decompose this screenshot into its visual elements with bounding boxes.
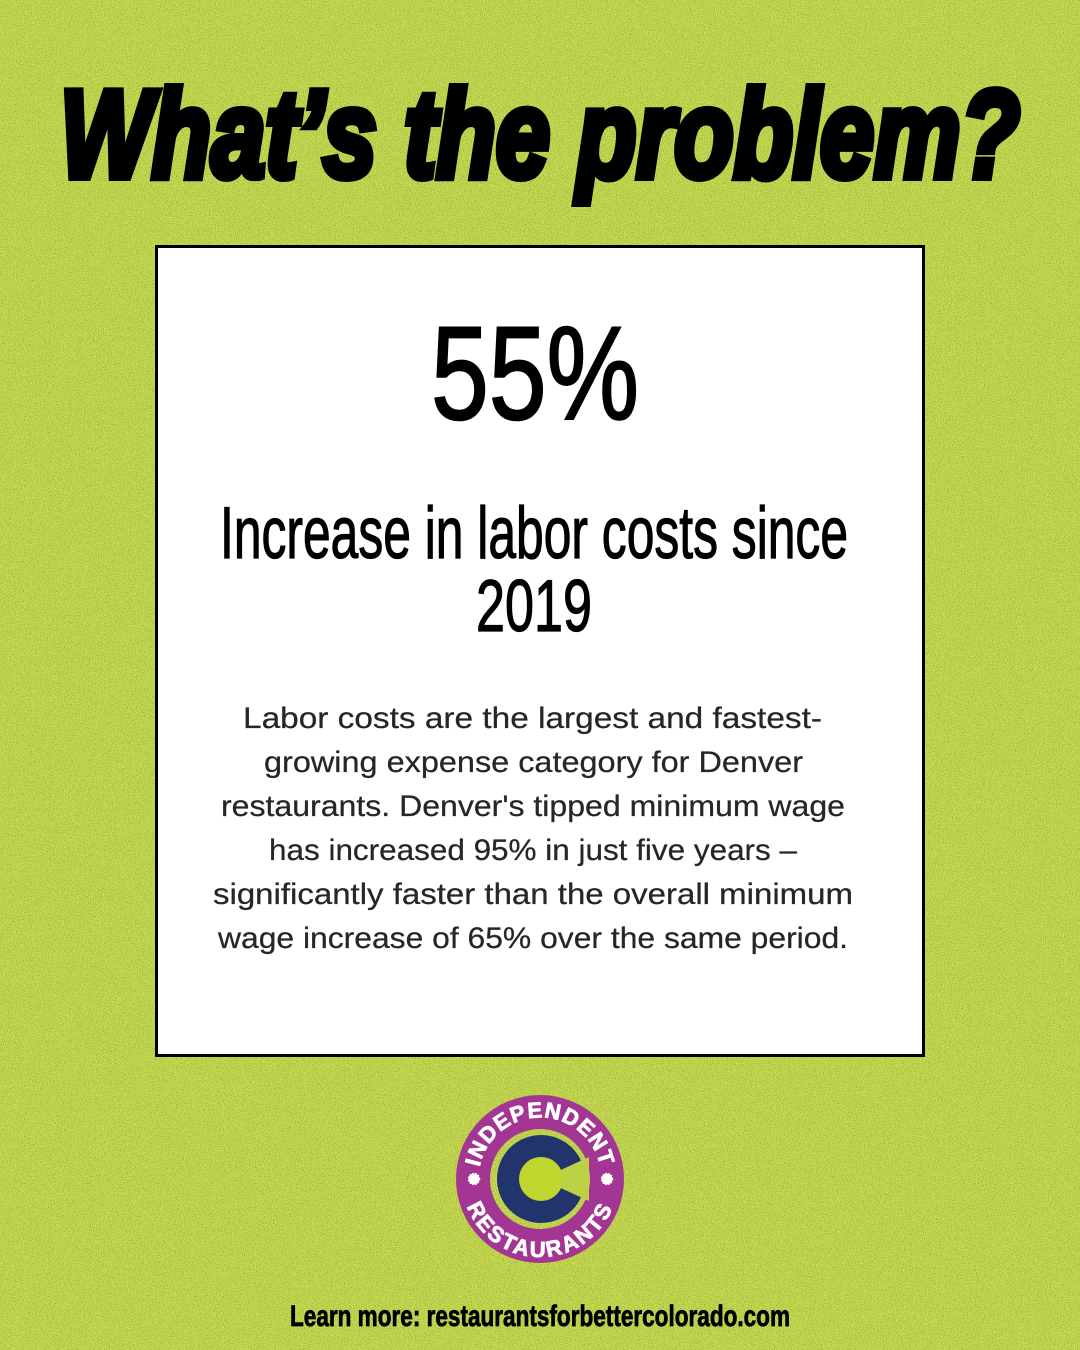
subheading: 2019 — [476, 566, 592, 647]
logo top text: INDEPENDENT — [464, 1102, 616, 1166]
logo ring — [456, 1095, 624, 1263]
logo left star — [468, 1174, 480, 1184]
body paragraph — [213, 702, 853, 955]
body paragraph: significantly faster than the overall minimum — [213, 878, 853, 911]
panel: labor cost statistic — [156, 246, 924, 1056]
logo: Independent Restaurants — [456, 1095, 624, 1263]
logo right star — [602, 1174, 612, 1184]
logo C mark — [497, 1135, 589, 1223]
body paragraph: Labor costs are the largest and fastest- — [243, 702, 822, 735]
body paragraph: growing expense category for Denver — [264, 746, 803, 779]
subheading — [220, 493, 848, 647]
body paragraph: wage increase of 65% over the same period. — [217, 922, 848, 955]
body paragraph: has increased 95% in just five years – — [269, 834, 797, 867]
logo bottom text: RESTAURANTS — [466, 1200, 611, 1258]
panel background — [156, 246, 924, 1056]
body paragraph: restaurants. Denver's tipped minimum wage — [221, 790, 845, 823]
footer link: Learn more: restaurantsforbettercolorado.com — [290, 1300, 790, 1333]
big number: 55% — [431, 300, 639, 448]
